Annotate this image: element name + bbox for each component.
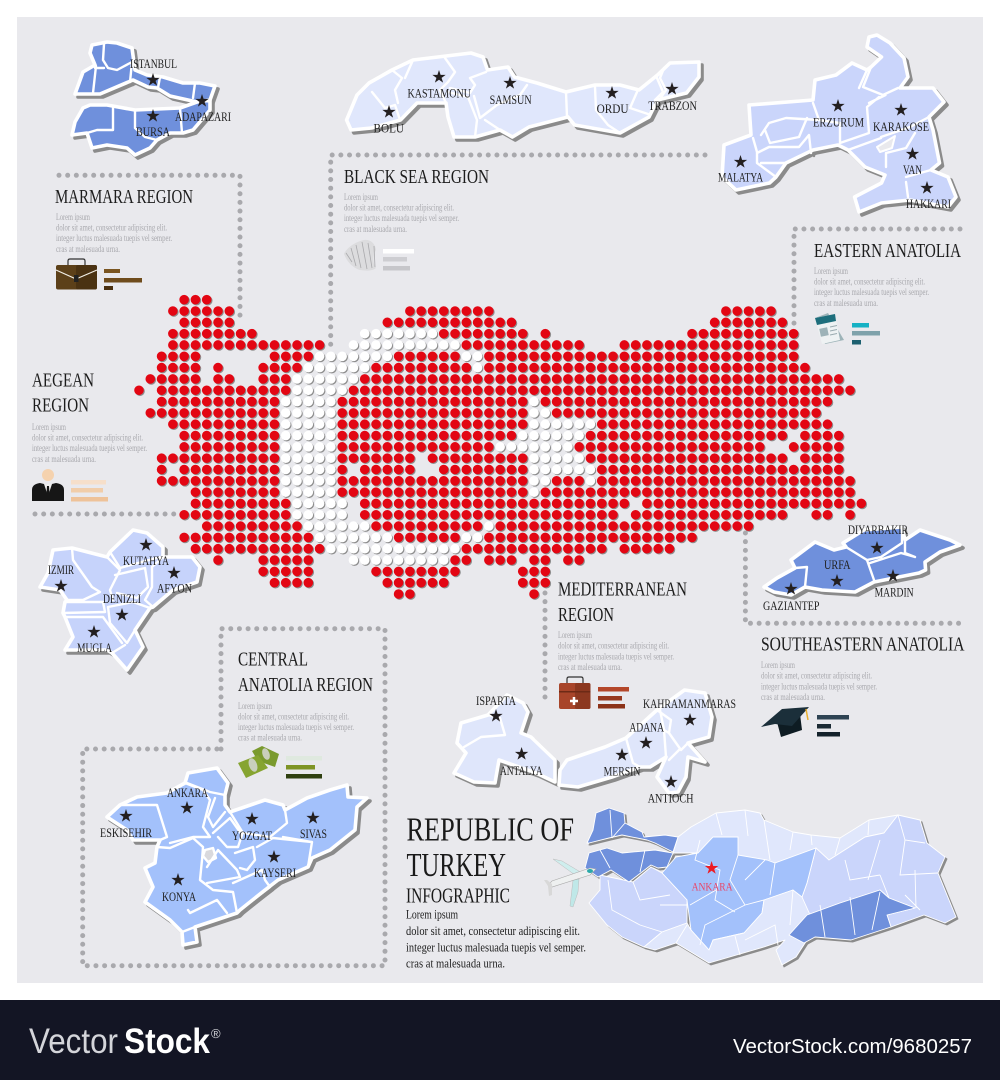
text block: Southeastern Anatolia: Lorem ipsum: [761, 661, 795, 671]
text block: Southeastern Anatolia: dolor sit amet, consectetur adipiscing elit.: [761, 672, 872, 682]
city stars and labels: Aegean: [48, 538, 192, 655]
text block: Marmara: [56, 213, 172, 255]
text block: intro: [406, 907, 586, 971]
province borders: [600, 810, 938, 955]
footer logo: Stock: [124, 1022, 210, 1061]
city stars and labels: Southeastern Anatolia: [763, 522, 914, 613]
title: REPUBLIC OF: [406, 812, 574, 849]
text block: intro: cras at malesuada urna.: [406, 956, 505, 971]
heading: Mediterranean Region: MEDITERRANEAN: [558, 579, 687, 601]
footer bar: [0, 1000, 1000, 1080]
city stars and labels: Marmara: ISTANBUL: [130, 56, 177, 71]
city stars and labels: Central Anatolia: ESKISEHIR: [100, 825, 152, 840]
map: Black Sea: [347, 53, 699, 137]
icon: graduation cap: [761, 707, 809, 737]
city stars and labels: Aegean: AFYON: [157, 581, 192, 596]
text block: Eastern Anatolia: cras at malesuada urna.: [814, 299, 878, 309]
text block: Black Sea: [344, 193, 459, 235]
city stars and labels: Marmara: [130, 56, 231, 139]
text block: Black Sea: cras at malesuada urna.: [344, 225, 407, 235]
panel: Mediterranean region: [454, 579, 736, 806]
text block: Central Anatolia: integer luctus malesuada tuepis vel semper.: [238, 723, 354, 733]
panel: Southeastern Anatolia: [761, 522, 965, 737]
text block: Marmara: cras at malesuada urna.: [56, 245, 120, 255]
text block: Southeastern Anatolia: [761, 661, 877, 703]
panel: Eastern Anatolia: [718, 35, 961, 344]
city stars and labels: Aegean: MUGLA: [77, 640, 112, 655]
icon: airplane: [544, 859, 596, 907]
city stars and labels: Southeastern Anatolia: GAZIANTEP: [763, 598, 820, 613]
city stars and labels: Mediterranean: ANTALYA: [500, 763, 543, 778]
city stars and labels: Southeastern Anatolia: URFA: [824, 557, 851, 572]
icon: newspaper: [815, 313, 844, 344]
city stars and labels: Mediterranean: ANTIOCH: [648, 791, 694, 806]
icon: briefcase: [56, 259, 97, 290]
heading: Aegean Region: REGION: [32, 395, 89, 417]
star and label: Ankara: ANKARA: [692, 880, 733, 894]
text block: Southeastern Anatolia: integer luctus malesuada tuepis vel semper.: [761, 682, 877, 692]
city stars and labels: Black Sea: SAMSUN: [490, 92, 532, 107]
title: TURKEY: [406, 847, 506, 884]
city stars and labels: Central Anatolia: KAYSERI: [254, 865, 296, 880]
map: whole Turkey by region: [585, 808, 956, 965]
icon bars: Black Sea: [383, 249, 414, 270]
city stars and labels: Central Anatolia: SIVAS: [300, 826, 327, 841]
text block: Mediterranean: Lorem ipsum: [558, 631, 592, 641]
heading: Central Anatolia Region: ANATOLIA REGION: [238, 674, 373, 696]
city stars and labels: Marmara: BURSA: [136, 124, 170, 139]
text block: Central Anatolia: cras at malesuada urna.: [238, 734, 302, 744]
city stars and labels: Eastern Anatolia: KARAKOSE: [873, 119, 929, 134]
icon bars: Marmara: [104, 269, 142, 290]
city stars and labels: Aegean: DENIZLI: [103, 591, 141, 606]
heading: Marmara Region: MARMARA REGION: [55, 186, 193, 208]
icon: medical kit: [559, 677, 590, 709]
text block: intro: dolor sit amet, consectetur adipiscing elit.: [406, 923, 580, 938]
map: Marmara: [72, 42, 215, 155]
city stars and labels: Black Sea: ORDU: [597, 101, 629, 116]
text block: Mediterranean: integer luctus malesuada tuepis vel semper.: [558, 652, 674, 662]
panel: Black Sea region: [344, 53, 699, 271]
city stars and labels: Eastern Anatolia: [718, 99, 951, 211]
text block: Aegean: cras at malesuada urna.: [32, 455, 96, 465]
icon bars: Mediterranean: [598, 687, 629, 708]
text block: Aegean: Lorem ipsum: [32, 423, 66, 433]
city stars and labels: Aegean: KUTAHYA: [123, 553, 169, 568]
text block: Eastern Anatolia: [814, 267, 929, 309]
city stars and labels: Central Anatolia: ANKARA: [167, 785, 208, 800]
icon bars: Eastern Anatolia: [852, 323, 880, 344]
city stars and labels: Black Sea: [374, 70, 697, 136]
city stars and labels: Central Anatolia: [100, 785, 327, 904]
text block: Marmara: integer luctus malesuada tuepis vel semper.: [56, 234, 172, 244]
panel: Central Anatolia region: [100, 649, 373, 945]
text block: Black Sea: Lorem ipsum: [344, 193, 378, 203]
panel: Marmara region: [55, 42, 231, 290]
city stars and labels: Central Anatolia: KONYA: [162, 889, 196, 904]
title: INFOGRAPHIC: [406, 884, 510, 908]
footer url: VectorStock.com/9680257: [733, 1036, 972, 1058]
heading: Mediterranean Region: REGION: [558, 604, 614, 626]
text block: Aegean: integer luctus malesuada tuepis vel semper.: [32, 444, 147, 454]
map: Eastern Anatolia: [722, 35, 956, 212]
city stars and labels: Marmara: ADAPAZARI: [175, 109, 231, 124]
text block: Black Sea: integer luctus malesuada tuepis vel semper.: [344, 214, 459, 224]
heading: Central Anatolia Region: CENTRAL: [238, 649, 308, 671]
text block: Black Sea: dolor sit amet, consectetur adipiscing elit.: [344, 204, 454, 214]
city stars and labels: Southeastern Anatolia: DIYARBAKIR: [848, 522, 908, 537]
text block: Mediterranean: dolor sit amet, consectetur adipiscing elit.: [558, 642, 669, 652]
text block: Aegean: [32, 423, 147, 465]
city stars and labels: Mediterranean: ADANA: [629, 720, 664, 735]
panel: Aegean region: [32, 370, 200, 670]
map: Southeastern Anatolia: [764, 527, 960, 595]
city stars and labels: Black Sea: BOLU: [374, 121, 405, 136]
city stars and labels: Eastern Anatolia: VAN: [903, 162, 922, 177]
city stars and labels: Eastern Anatolia: MALATYA: [718, 170, 763, 185]
icon: banknotes: [238, 746, 279, 778]
text block: Eastern Anatolia: dolor sit amet, consectetur adipiscing elit.: [814, 278, 925, 288]
map: Mediterranean: [454, 690, 712, 793]
heading: Central Anatolia Region: [238, 649, 373, 696]
city stars and labels: Mediterranean: MERSIN: [604, 764, 641, 779]
city stars and labels: Southeastern Anatolia: MARDIN: [875, 585, 914, 600]
dotted flag map of Turkey: [139, 300, 861, 594]
text block: Southeastern Anatolia: cras at malesuada urna.: [761, 693, 825, 703]
text block: Central Anatolia: Lorem ipsum: [238, 702, 272, 712]
text block: Central Anatolia: [238, 702, 354, 744]
heading: Aegean Region: AEGEAN: [32, 370, 94, 392]
title: [406, 812, 574, 908]
city stars and labels: Mediterranean: [476, 693, 736, 806]
text block: Eastern Anatolia: Lorem ipsum: [814, 267, 848, 277]
heading: Mediterranean Region: [558, 579, 687, 626]
text block: Marmara: Lorem ipsum: [56, 213, 90, 223]
city stars and labels: Mediterranean: ISPARTA: [476, 693, 516, 708]
icon: businessman: [32, 469, 64, 501]
icon bars: Southeastern Anatolia: [817, 715, 849, 736]
footer logo: Vector: [29, 1022, 118, 1061]
text block: Marmara: dolor sit amet, consectetur adipiscing elit.: [56, 224, 167, 234]
city stars and labels: Central Anatolia: YOZGAT: [232, 828, 272, 843]
text block: Mediterranean: cras at malesuada urna.: [558, 663, 622, 673]
city stars and labels: Mediterranean: KAHRAMANMARAS: [643, 696, 736, 711]
title block: Republic of Turkey: [406, 812, 586, 971]
text block: Eastern Anatolia: integer luctus malesuada tuepis vel semper.: [814, 288, 929, 298]
regions: [585, 808, 956, 965]
city stars and labels: Eastern Anatolia: ERZURUM: [813, 115, 864, 130]
text block: intro: integer luctus malesuada tuepis vel semper.: [406, 940, 586, 955]
map: Aegean: [40, 530, 200, 670]
city stars and labels: Eastern Anatolia: HAKKARI: [906, 196, 951, 211]
text block: Aegean: dolor sit amet, consectetur adipiscing elit.: [32, 434, 143, 444]
icon bars: Central Anatolia: [286, 756, 322, 778]
text block: Central Anatolia: dolor sit amet, consectetur adipiscing elit.: [238, 712, 349, 722]
city stars and labels: Aegean: IZMIR: [48, 562, 74, 577]
city stars and labels: Black Sea: TRABZON: [648, 98, 697, 113]
map: Central Anatolia: [107, 768, 367, 945]
text block: Mediterranean: [558, 631, 674, 673]
heading: Aegean Region: [32, 370, 94, 417]
city stars and labels: Black Sea: KASTAMONU: [408, 86, 471, 101]
icon bars: Aegean: [71, 480, 108, 502]
star and label: Ankara: [692, 861, 733, 894]
footer logo: ®: [211, 1026, 221, 1041]
heading: Black Sea Region: BLACK SEA REGION: [344, 166, 489, 188]
icon: shell: [344, 240, 376, 271]
text block: intro: Lorem ipsum: [406, 907, 458, 922]
